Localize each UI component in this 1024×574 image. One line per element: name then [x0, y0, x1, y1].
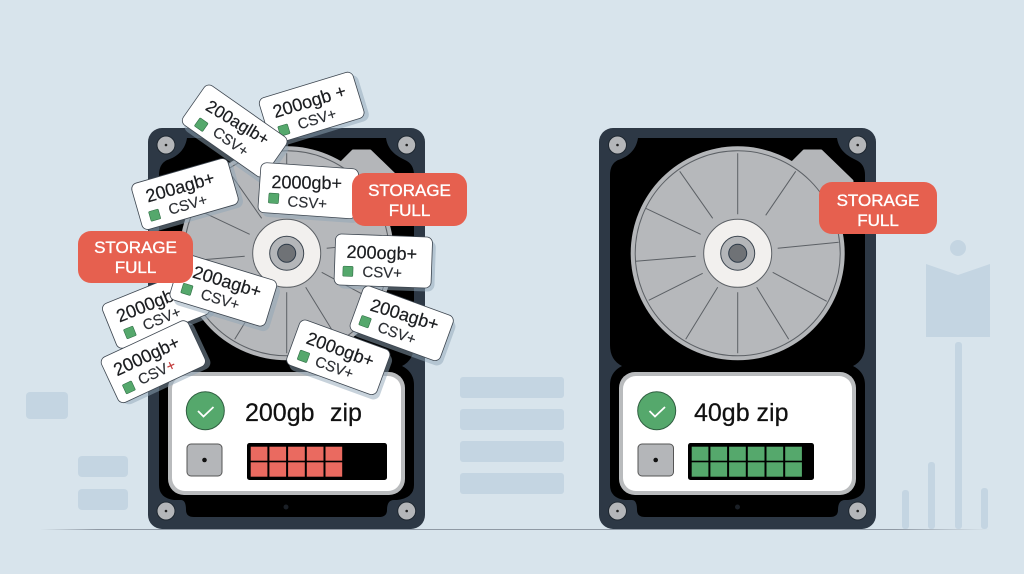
- storage full badge: upper right of left drive: [352, 173, 467, 226]
- file card: bottom left: 2000gb+: [110, 332, 183, 380]
- right label plate: [619, 372, 856, 495]
- file card: over platter left: CSV+: [199, 286, 242, 314]
- file card: bottom left: [99, 317, 213, 408]
- file card: top left: [178, 83, 294, 185]
- file card: lower left, behind: CSV+: [140, 304, 184, 334]
- right capacity bar: [688, 443, 814, 480]
- file card: lower right: CSV+: [375, 319, 418, 349]
- file card: lower left, behind: [101, 267, 217, 354]
- file card: top right: 200ogb +: [270, 81, 349, 122]
- storage full badge: upper right of left drive: STORAGE: [368, 181, 451, 200]
- left label plate: [168, 372, 405, 495]
- file card: bottom centre: [284, 318, 395, 401]
- storage full badge: left of left drive: STORAGE: [94, 238, 177, 257]
- file card: over platter left: [167, 252, 283, 333]
- file card: centre: 2000gb+: [271, 172, 342, 193]
- right drive cavity: [610, 138, 865, 517]
- storage full badge: right drive: FULL: [857, 211, 899, 230]
- file card: centre: [257, 162, 363, 223]
- file card: right: [334, 234, 436, 292]
- right indicator button: [638, 444, 674, 476]
- file card: bottom centre: 200ogb+: [304, 328, 377, 371]
- storage full badge: left of left drive: [78, 231, 193, 283]
- file card: top left: 200aglb+: [202, 97, 273, 149]
- file card: top right: [258, 70, 371, 149]
- left indicator button: [187, 444, 222, 476]
- left capacity bar: [247, 443, 387, 480]
- background ghost blocks: left: [26, 392, 128, 510]
- right check icon: [638, 392, 676, 430]
- left size text: zip: [330, 399, 362, 427]
- right size text: 40gb zip: [694, 399, 789, 427]
- left actuator: [342, 151, 401, 215]
- file card: left: CSV+: [167, 191, 210, 219]
- left size text: 200gb: [245, 399, 315, 427]
- background ghost blocks: centre: [460, 377, 564, 494]
- left screws: [157, 136, 416, 520]
- storage full badge: right drive: [819, 182, 937, 234]
- file card: bottom centre: CSV+: [313, 353, 356, 383]
- file card: bottom left: CSV+: [136, 356, 179, 389]
- file card: centre: CSV+: [287, 193, 328, 213]
- file card: lower left, behind: 2000gb+: [113, 281, 186, 326]
- file card: right: 200ogb+: [346, 242, 417, 264]
- storage full badge: upper right of left drive: FULL: [389, 201, 430, 220]
- left drive cavity: [159, 138, 414, 517]
- file card: left: [130, 156, 245, 235]
- file card: right: CSV+: [362, 264, 403, 282]
- right platter: [631, 146, 845, 360]
- file card: left: 200agb+: [144, 168, 217, 206]
- background ghost figure and bars: right: [902, 240, 990, 529]
- right hard drive: [599, 128, 876, 529]
- file card: top right: CSV+: [296, 105, 339, 133]
- left platter: [180, 146, 394, 360]
- right actuator: [793, 151, 852, 215]
- left drive casing: [148, 128, 425, 529]
- left hard drive: [148, 128, 425, 529]
- left check icon: [186, 392, 224, 430]
- file card: top left: CSV+: [209, 124, 252, 160]
- baseline: [40, 529, 990, 530]
- storage full badge: right drive: STORAGE: [837, 191, 919, 210]
- storage full badge: left of left drive: FULL: [115, 258, 156, 277]
- right drive casing: [599, 128, 876, 529]
- file card: over platter left: 200agb+: [190, 262, 264, 302]
- right screws: [608, 136, 867, 520]
- file card: lower right: [347, 284, 459, 367]
- file card: lower right: 200agb+: [368, 295, 441, 335]
